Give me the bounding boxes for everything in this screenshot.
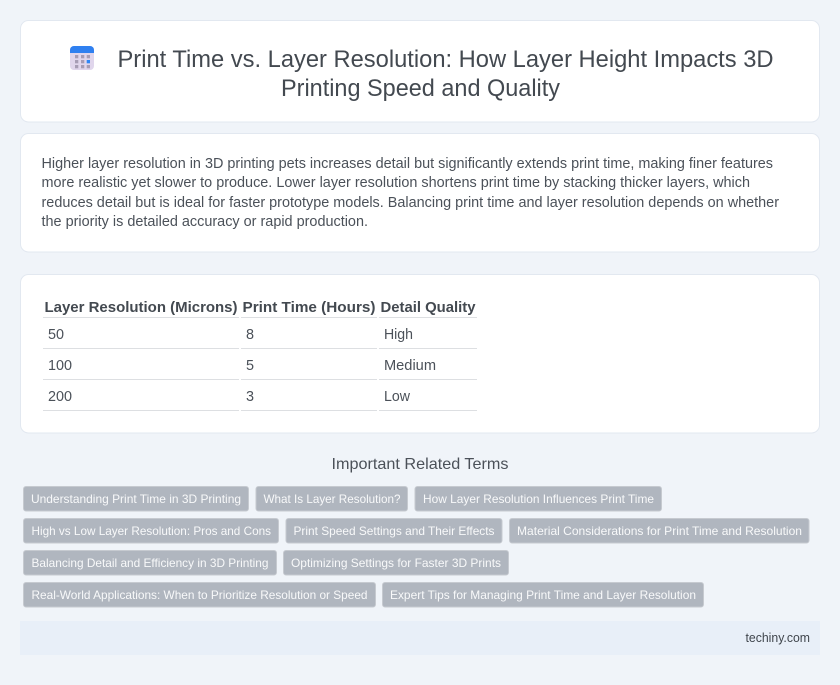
chip bbox=[382, 582, 704, 607]
related term chips bbox=[24, 486, 809, 607]
chip bbox=[24, 518, 278, 543]
title: Print Time vs. Layer Resolution: How Layer Height Impacts 3D bbox=[118, 46, 774, 73]
table rows: 200 bbox=[48, 389, 72, 405]
heading: important related terms: Important Related Terms bbox=[332, 456, 508, 473]
text block: description: Higher layer resolution in 3D printing pets increases detail but significantly extends print time, making finer features bbox=[42, 156, 773, 172]
text block: description: reduces detail but is ideal for faster prototype models. Balancing print time and layer resolution depends on whether bbox=[42, 195, 779, 211]
table rows: 100 bbox=[48, 358, 72, 374]
footer source text: techiny.com bbox=[746, 630, 810, 645]
panel: description card bbox=[20, 134, 820, 252]
chip bbox=[24, 582, 376, 607]
chip bbox=[284, 550, 508, 575]
table rows: 8 bbox=[246, 327, 254, 343]
chip: High vs Low Layer Resolution: Pros and Cons bbox=[32, 524, 271, 538]
chip: Understanding Print Time in 3D Printing bbox=[31, 492, 241, 506]
chip bbox=[24, 550, 276, 575]
table rows: Medium bbox=[384, 358, 436, 374]
icon: calendar bbox=[70, 46, 94, 70]
table header: Detail Quality bbox=[380, 299, 476, 316]
table rows: 5 bbox=[246, 358, 254, 374]
chip: Balancing Detail and Efficiency in 3D Printing bbox=[32, 556, 268, 570]
panel: title card bbox=[20, 20, 820, 122]
table header: Layer Resolution (Microns) bbox=[44, 299, 238, 316]
table header: Print Time (Hours) bbox=[242, 299, 376, 316]
table rows: Low bbox=[384, 389, 411, 405]
chip: Optimizing Settings for Faster 3D Prints bbox=[291, 556, 501, 570]
title bbox=[118, 46, 774, 102]
text block: description: more realistic yet slower to produce. Lower layer resolution shortens print time by stacking thicker layers, which bbox=[42, 175, 750, 191]
chip bbox=[256, 486, 408, 511]
footer bar bbox=[20, 621, 820, 655]
chip: What Is Layer Resolution? bbox=[264, 492, 401, 506]
chip: Print Speed Settings and Their Effects bbox=[294, 524, 494, 538]
chip bbox=[24, 486, 248, 511]
text block: description: the priority is detailed accuracy or rapid production. bbox=[42, 214, 368, 230]
chip: Real-World Applications: When to Prioritize Resolution or Speed bbox=[32, 588, 368, 602]
title: Printing Speed and Quality bbox=[281, 75, 560, 102]
chip: Material Considerations for Print Time and Resolution bbox=[517, 524, 802, 538]
table rows: 50 bbox=[48, 327, 64, 343]
table: layer resolution data bbox=[43, 299, 477, 410]
text block: description bbox=[42, 156, 779, 230]
panel: table card bbox=[20, 274, 820, 433]
chip bbox=[415, 486, 662, 511]
chip bbox=[286, 518, 502, 543]
chip bbox=[510, 518, 809, 543]
table rows bbox=[48, 327, 436, 405]
chip: How Layer Resolution Influences Print Time bbox=[423, 492, 654, 506]
table rows: High bbox=[384, 327, 413, 343]
table rows: 3 bbox=[246, 389, 254, 405]
table header bbox=[44, 299, 476, 316]
chip: Expert Tips for Managing Print Time and Layer Resolution bbox=[390, 588, 696, 602]
